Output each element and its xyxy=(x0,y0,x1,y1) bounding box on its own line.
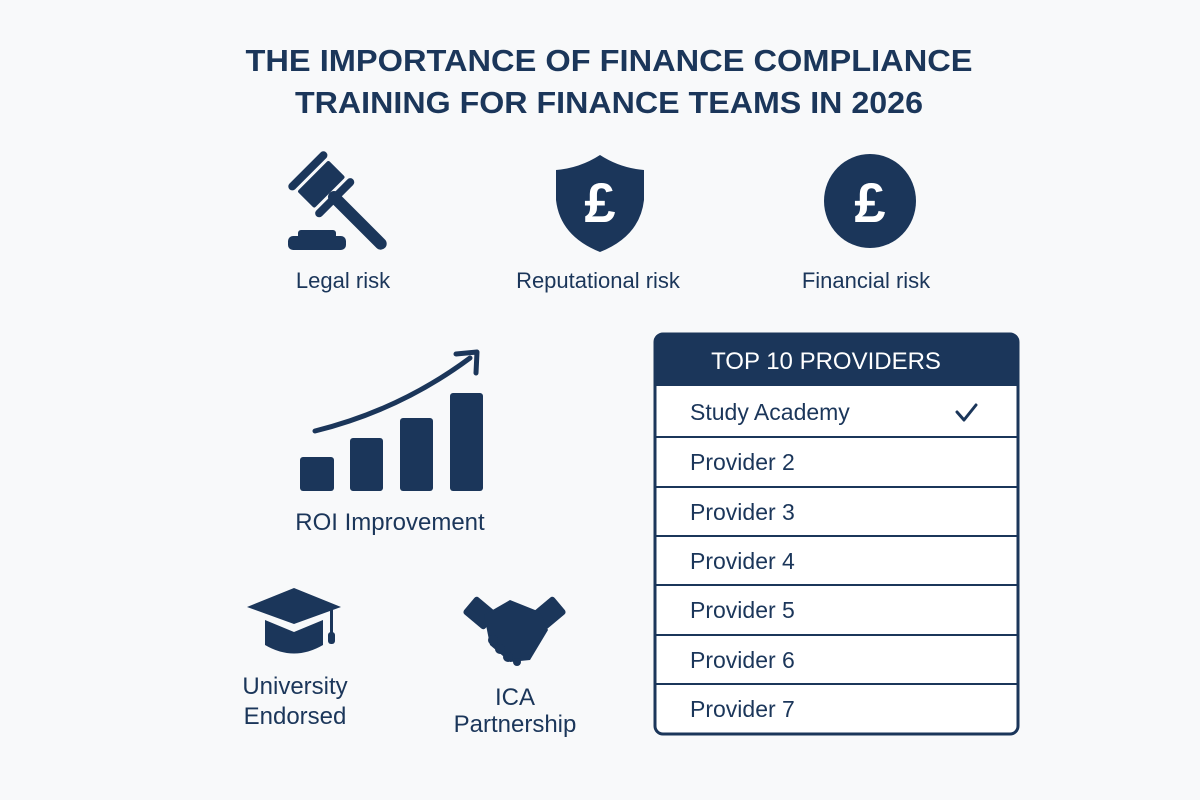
provider rows: Provider 4 xyxy=(690,548,795,574)
icon: shield pound xyxy=(556,155,644,252)
text: Partnership xyxy=(454,711,576,738)
panel: top 10 providers: TOP 10 PROVIDERS xyxy=(711,348,941,375)
label: ROI improvement: ROI Improvement xyxy=(295,509,485,536)
title xyxy=(246,43,972,120)
provider rows: Provider 2 xyxy=(690,449,795,475)
label: legal risk: Legal risk xyxy=(296,268,391,293)
header xyxy=(655,334,1018,386)
panel: top 10 providers xyxy=(655,334,1018,734)
icon: check xyxy=(957,405,976,420)
icon: coin pound xyxy=(824,154,916,248)
provider rows: Provider 6 xyxy=(690,647,795,673)
label: financial risk: Financial risk xyxy=(802,268,931,293)
chart: ROI bars with arrow xyxy=(300,352,483,491)
label: ICA partnership: ICA xyxy=(495,684,535,711)
label: reputational risk: Reputational risk xyxy=(516,268,681,293)
icon: coin pound: £ xyxy=(854,171,886,234)
icon: shield pound: £ xyxy=(584,171,616,234)
provider rows xyxy=(690,399,850,722)
provider rows: Provider 5 xyxy=(690,597,795,623)
provider rows: Provider 7 xyxy=(690,696,795,722)
icon: graduation cap xyxy=(247,588,341,654)
provider rows: Study Academy xyxy=(690,399,850,425)
icon: handshake xyxy=(462,596,567,666)
text: Endorsed xyxy=(244,703,346,730)
provider rows: Provider 3 xyxy=(690,499,795,525)
title: THE IMPORTANCE OF FINANCE COMPLIANCE xyxy=(246,43,972,78)
title: TRAINING FOR FINANCE TEAMS IN 2026 xyxy=(295,85,923,120)
label: university endorsed: University xyxy=(242,673,348,700)
icon: gavel xyxy=(287,150,403,266)
